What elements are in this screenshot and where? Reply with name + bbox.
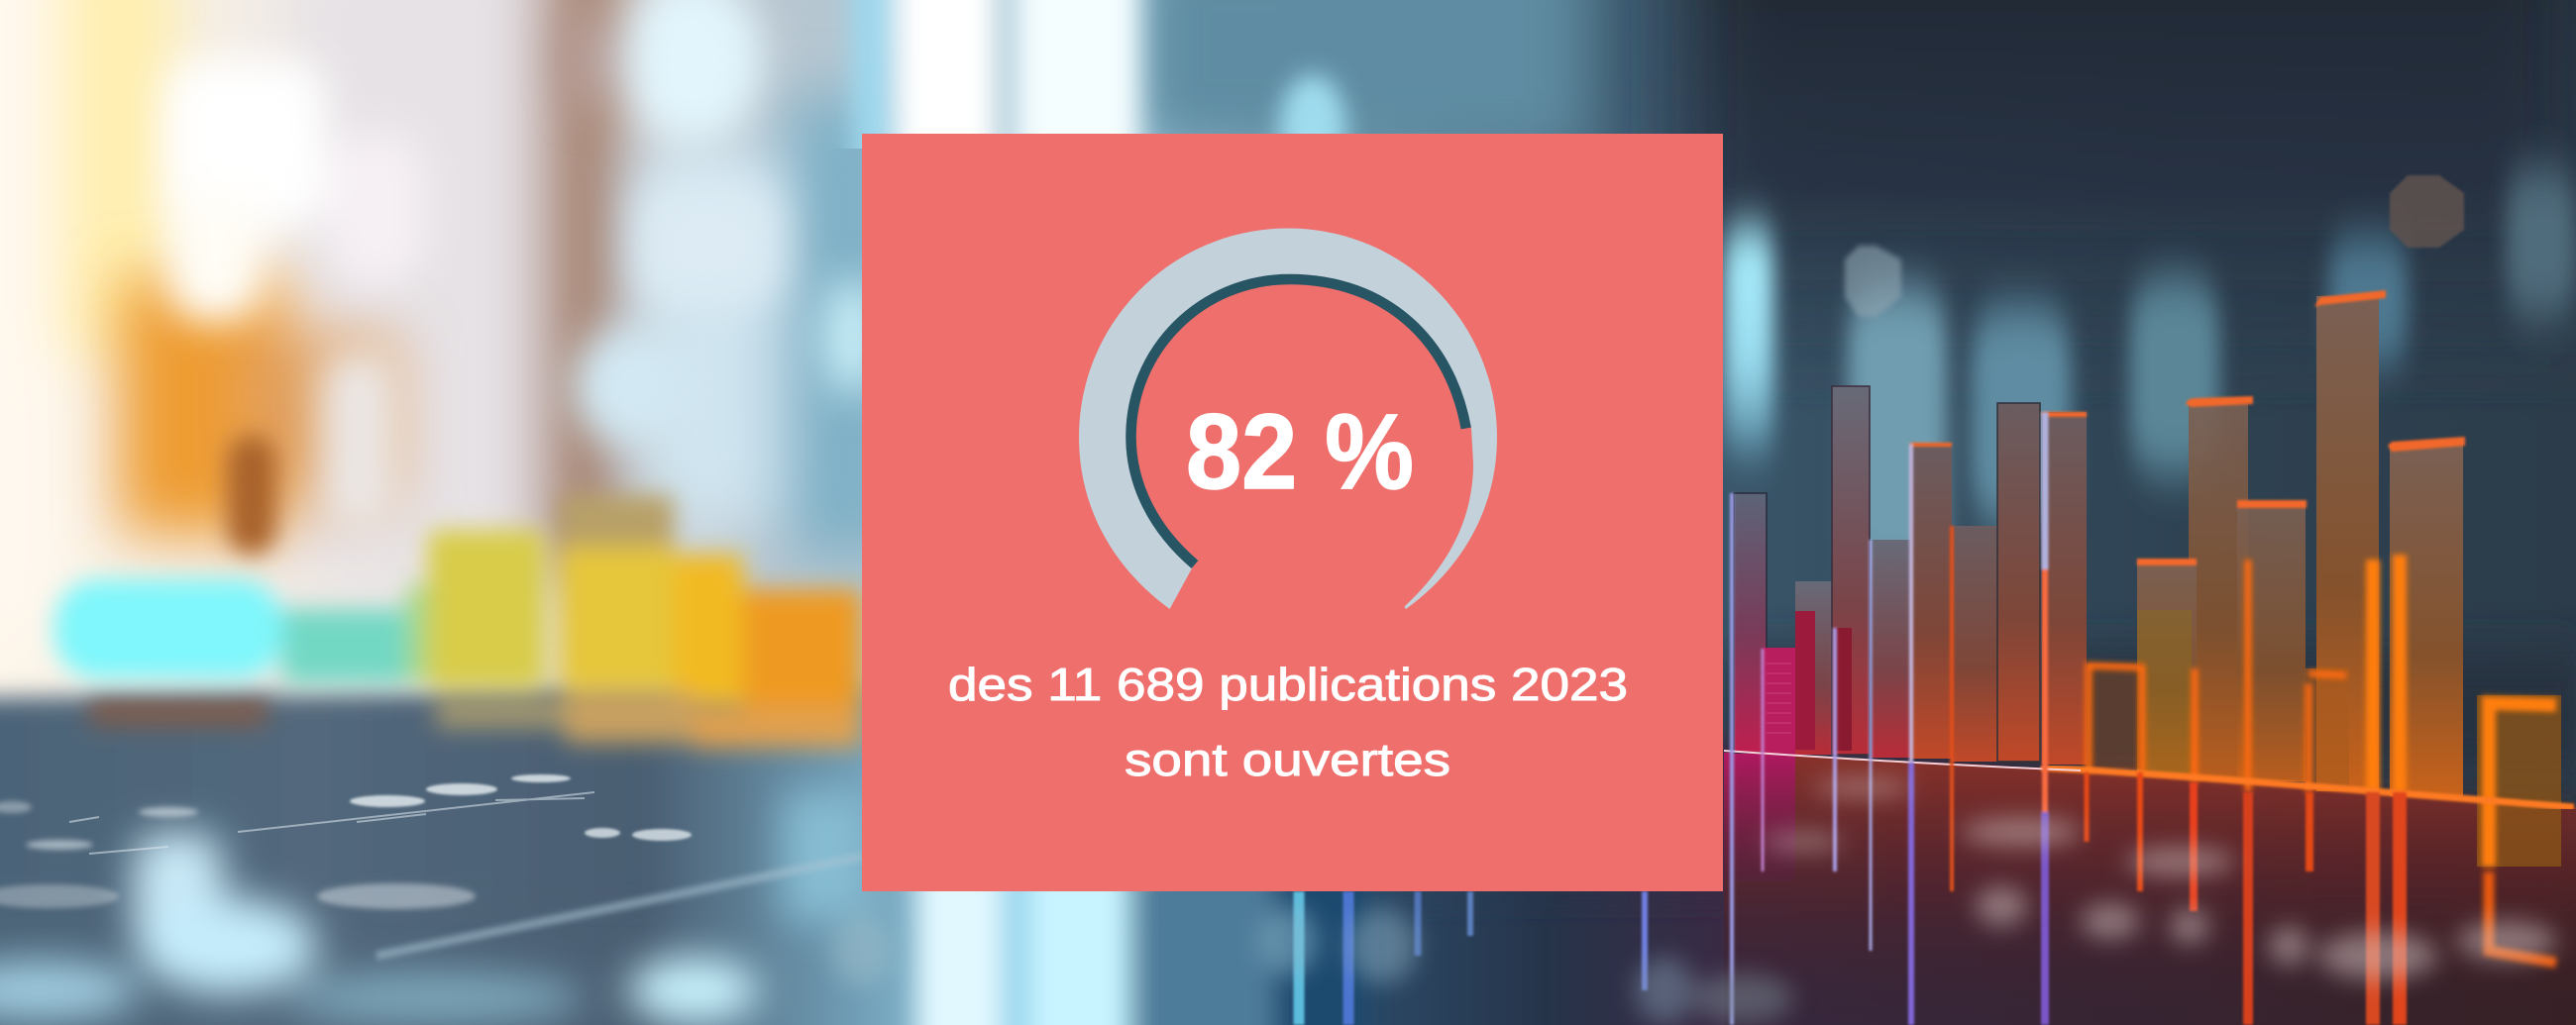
blurred ghost numerals on the floor, left <box>0 774 862 956</box>
panel: statistic card <box>862 134 1723 891</box>
value: 82 %: 82 % <box>1186 391 1414 511</box>
gauge progress arc <box>1131 279 1466 564</box>
dark upper right <box>1684 0 2576 416</box>
gauge track <box>1079 228 1497 609</box>
bokeh hexagons <box>1845 175 2464 317</box>
blurred coloured bars, left <box>54 495 862 748</box>
3D bar chart, right <box>1724 290 2574 963</box>
floor reflection and glowing vertical lines <box>1299 412 2400 1025</box>
bokeh reflections on the floor, left and centre <box>0 792 872 1024</box>
caption line 2: sont ouvertes <box>1125 734 1450 785</box>
blurred data marks on the floor, right <box>832 779 2556 1024</box>
pale cyan glow above the card <box>1279 74 1346 183</box>
gauge: open-access ratio <box>1079 228 1497 609</box>
bright columns under the card <box>916 881 1367 1025</box>
lower floor surface <box>0 688 2576 1025</box>
caption line 1: des 11 689 publications 2023 <box>948 659 1628 710</box>
